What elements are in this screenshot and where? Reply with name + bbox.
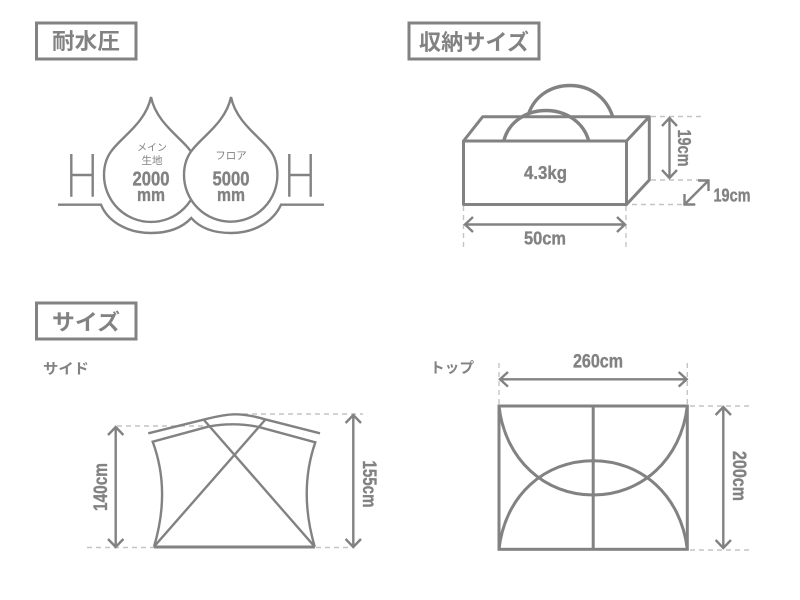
heading: size: サイズ: [52, 305, 120, 337]
text: floor rating: 5000: [212, 168, 250, 190]
heading: size: [36, 303, 136, 339]
upward arc: [499, 461, 687, 549]
ground line: [58, 205, 324, 233]
icon: right H height marker: [289, 154, 311, 197]
label: 260cm: 260cm: [573, 352, 623, 372]
label: 155cm: 155cm: [358, 460, 379, 508]
text: floor rating: フロア: [215, 148, 247, 163]
label: top view: トップ: [430, 357, 475, 378]
heading: water resistance: 耐水圧: [52, 24, 120, 56]
label: height 19cm: 19cm: [674, 130, 694, 166]
floor outline: [499, 406, 687, 549]
label: 50cm: 50cm: [524, 228, 566, 248]
arrow: height 19cm: [662, 118, 677, 178]
bag outline: [464, 117, 649, 204]
weight label: 4.3kg: [524, 163, 567, 183]
heading: storage size: 収納サイズ: [419, 25, 529, 57]
text: main fabric rating: mm: [137, 185, 165, 205]
icon: floor drop: [184, 97, 277, 222]
front handle: [504, 110, 588, 140]
label: side view: サイド: [43, 358, 89, 379]
centre line: [592, 406, 595, 549]
arrow: 140cm: [108, 427, 123, 547]
label: depth 19cm: 19cm: [714, 186, 750, 206]
text: floor rating: mm: [217, 185, 245, 205]
arrow: width 50cm: [465, 217, 625, 232]
icon: main fabric drop: [104, 97, 198, 222]
downward arc: [499, 406, 687, 495]
cross poles: [154, 420, 315, 547]
diagram: tent top view: [499, 352, 750, 550]
text: main fabric rating: [132, 139, 170, 205]
inner roof and walls: [153, 424, 315, 547]
label: 200cm: 200cm: [728, 451, 749, 501]
diagram: tent side view: [87, 414, 379, 548]
back handle: [528, 86, 612, 116]
diagram: water resistance drops: [58, 97, 324, 233]
text: floor rating: [212, 148, 250, 205]
text: main fabric rating: メイン: [137, 139, 167, 154]
text: main fabric rating: 2000: [132, 168, 170, 190]
diagram: storage bag: [464, 86, 750, 250]
heading: water resistance: [36, 23, 136, 59]
arrow: 155cm: [346, 415, 361, 547]
outer roof: [148, 414, 320, 433]
arrow: 260cm: [500, 372, 687, 387]
floor: [154, 546, 315, 548]
text: main fabric rating: 生地: [142, 153, 163, 168]
label: 140cm: 140cm: [91, 463, 112, 511]
icon: left H height marker: [71, 154, 93, 197]
arrow: 200cm: [716, 407, 731, 548]
arrow: depth 19cm: [684, 180, 708, 204]
